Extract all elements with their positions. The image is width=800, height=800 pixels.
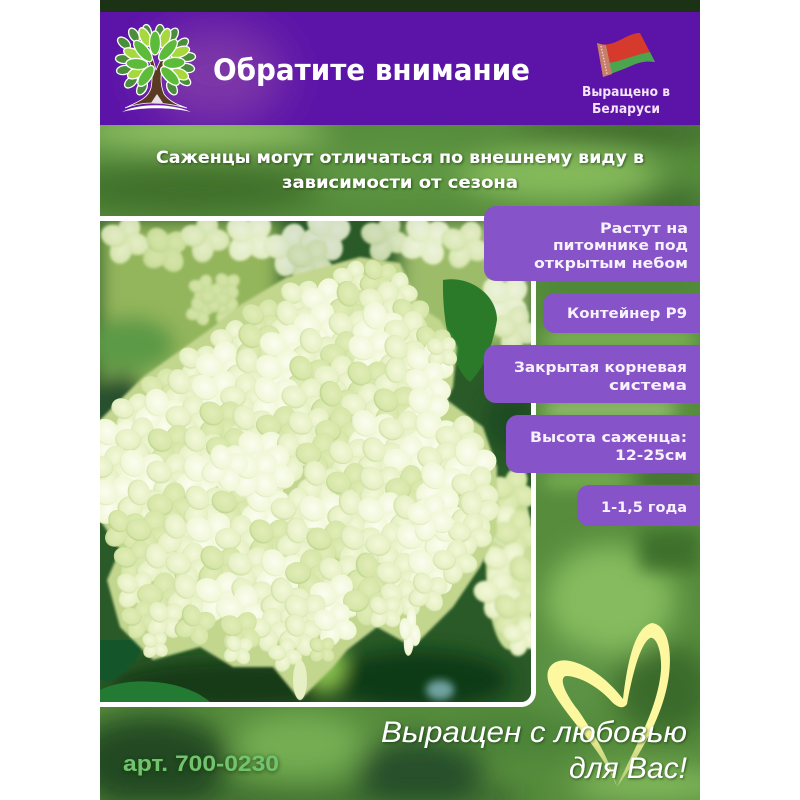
white photo frame	[100, 218, 534, 704]
grown in Belarus caption: Выращено в	[582, 85, 670, 100]
label: grown outdoors: питомнике под	[553, 238, 688, 254]
right side flower	[472, 469, 531, 658]
label: container	[543, 293, 700, 333]
green blurred background	[100, 0, 700, 800]
leaves	[115, 24, 196, 97]
feature labels	[484, 206, 700, 526]
label: grown outdoors	[484, 206, 700, 281]
label: closed root system: Закрытая корневая	[514, 360, 687, 376]
subtitle notice: Саженцы могут отличаться по внешнему виду в	[156, 148, 644, 168]
label: seedling height: Высота саженца:	[530, 430, 687, 446]
grown in Belarus caption: Беларуси	[592, 102, 660, 117]
icon: yellow heart	[547, 623, 670, 787]
label: grown outdoors: Растут на	[600, 221, 688, 237]
header band	[100, 12, 700, 125]
slogan	[381, 716, 688, 785]
label: container: Контейнер Р9	[567, 306, 687, 322]
blurred background flowers	[100, 221, 531, 345]
dark green leaf	[443, 279, 497, 382]
grown in Belarus caption	[582, 85, 670, 117]
label: closed root system	[484, 345, 700, 403]
label: age: 1-1,5 года	[601, 500, 687, 516]
article number: арт. 700-0230	[123, 751, 279, 776]
slogan: Выращен с любовью	[381, 716, 687, 749]
icon: Belarus flag	[597, 33, 655, 77]
subtitle notice: зависимости от сезона	[282, 173, 518, 193]
lower leaf	[100, 681, 210, 702]
label: closed root system: система	[609, 378, 687, 394]
photo of white hydrangea	[100, 216, 536, 707]
slogan: для Вас!	[569, 752, 688, 785]
hydrangea flower head	[77, 251, 508, 700]
label: grown outdoors: открытым небом	[534, 256, 688, 272]
title: Обратите внимание	[213, 53, 530, 87]
subtitle notice	[156, 148, 644, 193]
icon: tree logo	[115, 24, 196, 112]
label: seedling height: 12-25см	[615, 448, 687, 464]
label: seedling height	[506, 415, 700, 473]
label: age	[577, 485, 700, 526]
